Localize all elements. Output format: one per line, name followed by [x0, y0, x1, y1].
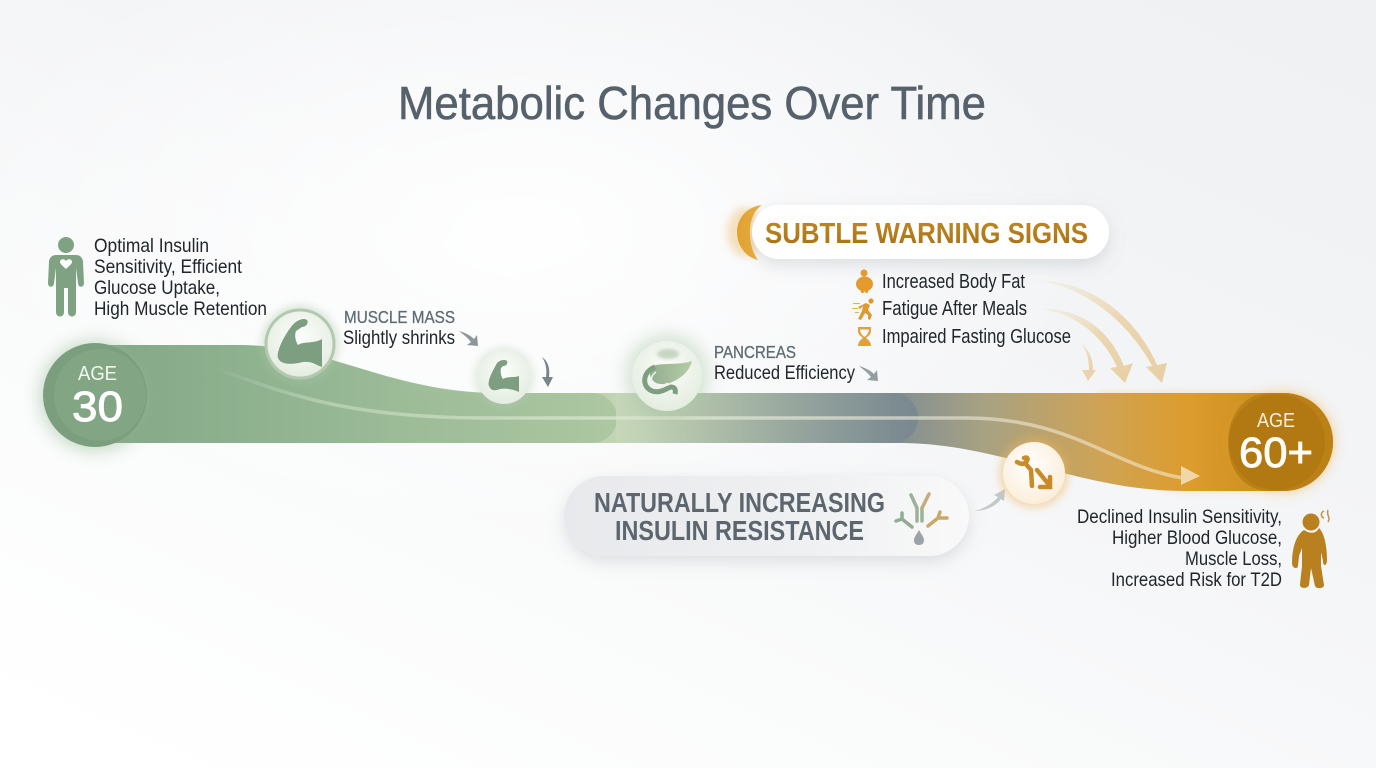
- icon: pancreas circle: [625, 334, 709, 418]
- arrow: resistance to receptor: [974, 489, 1005, 511]
- arrow: pancreas text: [859, 366, 878, 381]
- text: age 30 description: [94, 235, 267, 320]
- arrow: muscle down: [542, 357, 553, 387]
- text: age 60 description: [1077, 506, 1282, 591]
- text: age 60 description: Higher Blood Glucose,: [1112, 527, 1282, 549]
- text: age 60 description: Muscle Loss,: [1185, 548, 1282, 570]
- age 60+ badge: 60+: [1239, 429, 1313, 477]
- text: age 60 description: Declined Insulin Sensitivity,: [1077, 506, 1282, 528]
- pill: subtle warning signs: [727, 205, 1109, 260]
- arrow: muscle text: [459, 331, 478, 346]
- text: age 60 description: Increased Risk for T2D: [1111, 569, 1282, 591]
- age 30 badge: 30: [72, 383, 123, 431]
- text: age 30 description: Sensitivity, Efficient: [94, 256, 243, 278]
- icon: large muscle circle: [261, 305, 339, 383]
- text: pancreas: Reduced Efficiency: [714, 362, 855, 384]
- text: age 30 description: Optimal Insulin: [94, 235, 209, 257]
- text: pancreas: PANCREAS: [714, 342, 796, 362]
- arrows: warnings to band: [1042, 281, 1167, 383]
- text: pancreas: [714, 342, 855, 384]
- warning list: [852, 270, 1071, 348]
- text: muscle mass: MUSCLE MASS: [344, 307, 455, 327]
- text: impaired: Impaired Fasting Glucose: [882, 326, 1071, 348]
- text: NATURALLY INCREASING: [594, 487, 885, 518]
- pill: naturally increasing insulin resistance: [564, 476, 969, 556]
- icon: hourglass: [858, 327, 871, 346]
- age 60+ badge: AGE: [1257, 410, 1295, 432]
- ribbon arrowhead: [1181, 466, 1200, 485]
- text: age 30 description: High Muscle Retention: [94, 298, 267, 320]
- text: [594, 487, 885, 546]
- person icon: healthy: [48, 237, 84, 316]
- icon: body fat: [856, 270, 873, 293]
- text: muscle mass: [343, 307, 455, 349]
- pill: subtle warning signs: SUBTLE WARNING SIGNS: [765, 218, 1088, 250]
- person icon: aged: [1292, 510, 1329, 588]
- text: age 30 description: Glucose Uptake,: [94, 277, 220, 299]
- icon: receptors: [896, 494, 947, 545]
- timeline band: [96, 345, 1333, 491]
- segment: muscle: [400, 393, 617, 443]
- title: Metabolic Changes Over Time: [398, 77, 986, 129]
- age 30 badge: AGE: [78, 363, 117, 385]
- icon: receptor circle: [999, 438, 1069, 508]
- text: body fat: Increased Body Fat: [882, 271, 1025, 293]
- age 60+ badge: [1228, 393, 1333, 491]
- text: INSULIN RESISTANCE: [615, 515, 864, 546]
- text: muscle mass: Slightly shrinks: [343, 327, 455, 349]
- flow ribbon: [215, 368, 1183, 478]
- heart: [60, 259, 72, 269]
- age 30 badge: [39, 340, 151, 452]
- segment: pancreas: [616, 393, 918, 443]
- icon: fatigue runner: [852, 298, 874, 320]
- text: fatigue: Fatigue After Meals: [882, 298, 1027, 320]
- icon: small muscle circle: [474, 347, 534, 407]
